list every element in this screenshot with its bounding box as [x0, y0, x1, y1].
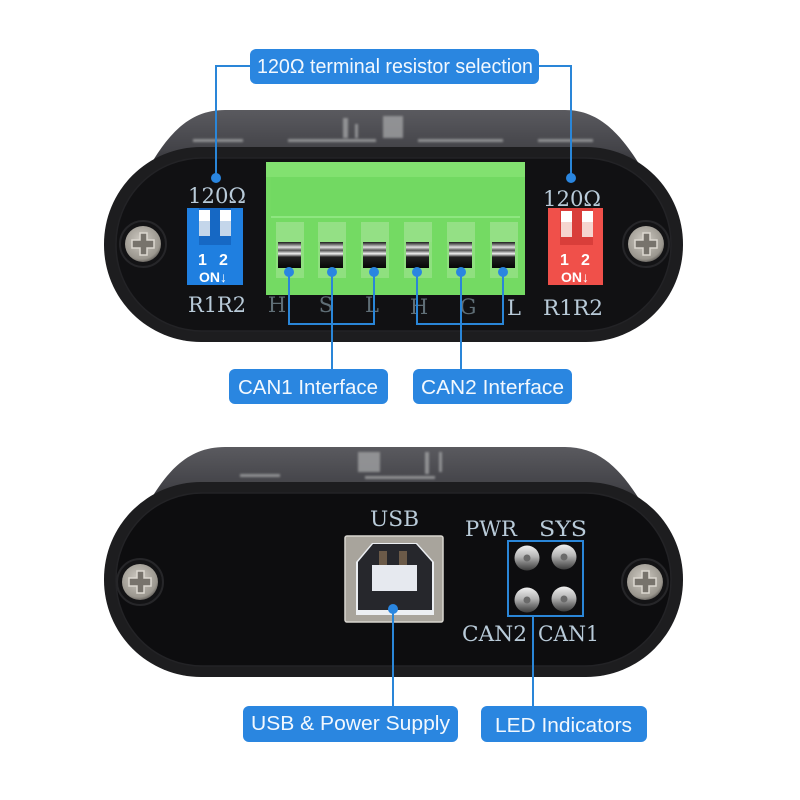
callout: 120Ω terminal resistor selection: 120Ω terminal resistor selection [257, 56, 533, 78]
blue DIP switch [187, 208, 243, 285]
silkscreen labels: bottom device: SYS [539, 517, 587, 541]
silkscreen labels: bottom device: CAN1 [538, 622, 599, 646]
silkscreen labels: top device [188, 184, 603, 320]
silkscreen labels: top device: R1R2 [543, 296, 603, 320]
front face inner panel [116, 158, 671, 331]
blue DIP switch: 2 [219, 252, 228, 269]
red DIP switch: 2 [581, 252, 590, 269]
silkscreen labels: top device: H [410, 295, 428, 319]
silkscreen labels: bottom device [370, 507, 599, 646]
silkscreen labels: bottom device: CAN2 [462, 622, 527, 646]
callout: 120Ω terminal resistor selection [250, 49, 539, 84]
green terminal block [266, 162, 525, 295]
silkscreen labels: top device: R1R2 [188, 293, 246, 317]
LED highlight box and leader [508, 541, 583, 706]
callout: USB & Power Supply [243, 706, 458, 742]
blue DIP switch: ON↓ [199, 269, 227, 285]
silkscreen labels: top device: S [319, 293, 333, 317]
leader lines: CAN2 [412, 267, 508, 369]
right screw [622, 559, 668, 605]
callout: LED Indicators [481, 706, 647, 742]
shell print marks [193, 116, 593, 142]
device: top view, CAN side [104, 110, 683, 342]
USB-B port [345, 536, 443, 622]
right screw [623, 221, 669, 267]
callout: CAN1 Interface: CAN1 Interface [238, 377, 378, 399]
leader lines: terminal resistor [211, 66, 576, 183]
silkscreen labels: top device: 120Ω [543, 187, 601, 211]
callout: USB & Power Supply: USB & Power Supply [251, 713, 450, 735]
silkscreen labels: top device: G [460, 295, 476, 319]
device front face [104, 482, 683, 677]
red DIP switch [548, 208, 603, 285]
silkscreen labels: top device: 120Ω [188, 184, 246, 208]
device shell top [146, 447, 644, 507]
leader lines: CAN1 [284, 267, 379, 369]
callout: CAN2 Interface [413, 369, 572, 404]
device shell top [146, 110, 644, 172]
red DIP switch: 1 [560, 252, 569, 269]
red DIP switch: ON↓ [561, 269, 589, 285]
callout: CAN1 Interface [229, 369, 388, 404]
shell print marks [240, 452, 442, 479]
silkscreen labels: top device: L [365, 293, 379, 317]
leader line: USB [388, 604, 398, 706]
left screw [120, 221, 166, 267]
left screw [117, 559, 163, 605]
silkscreen labels: top device: H [268, 293, 286, 317]
LEDs [514, 544, 576, 612]
silkscreen labels: bottom device: USB [370, 507, 419, 531]
device front face [104, 147, 683, 342]
callout: CAN2 Interface: CAN2 Interface [421, 377, 564, 399]
silkscreen labels: top device: L [507, 296, 521, 320]
callout: LED Indicators: LED Indicators [495, 715, 632, 737]
silkscreen labels: bottom device: PWR [465, 517, 518, 541]
blue DIP switch: 1 [198, 252, 207, 269]
front face inner panel [116, 493, 671, 666]
device: bottom view, USB side [104, 447, 683, 677]
